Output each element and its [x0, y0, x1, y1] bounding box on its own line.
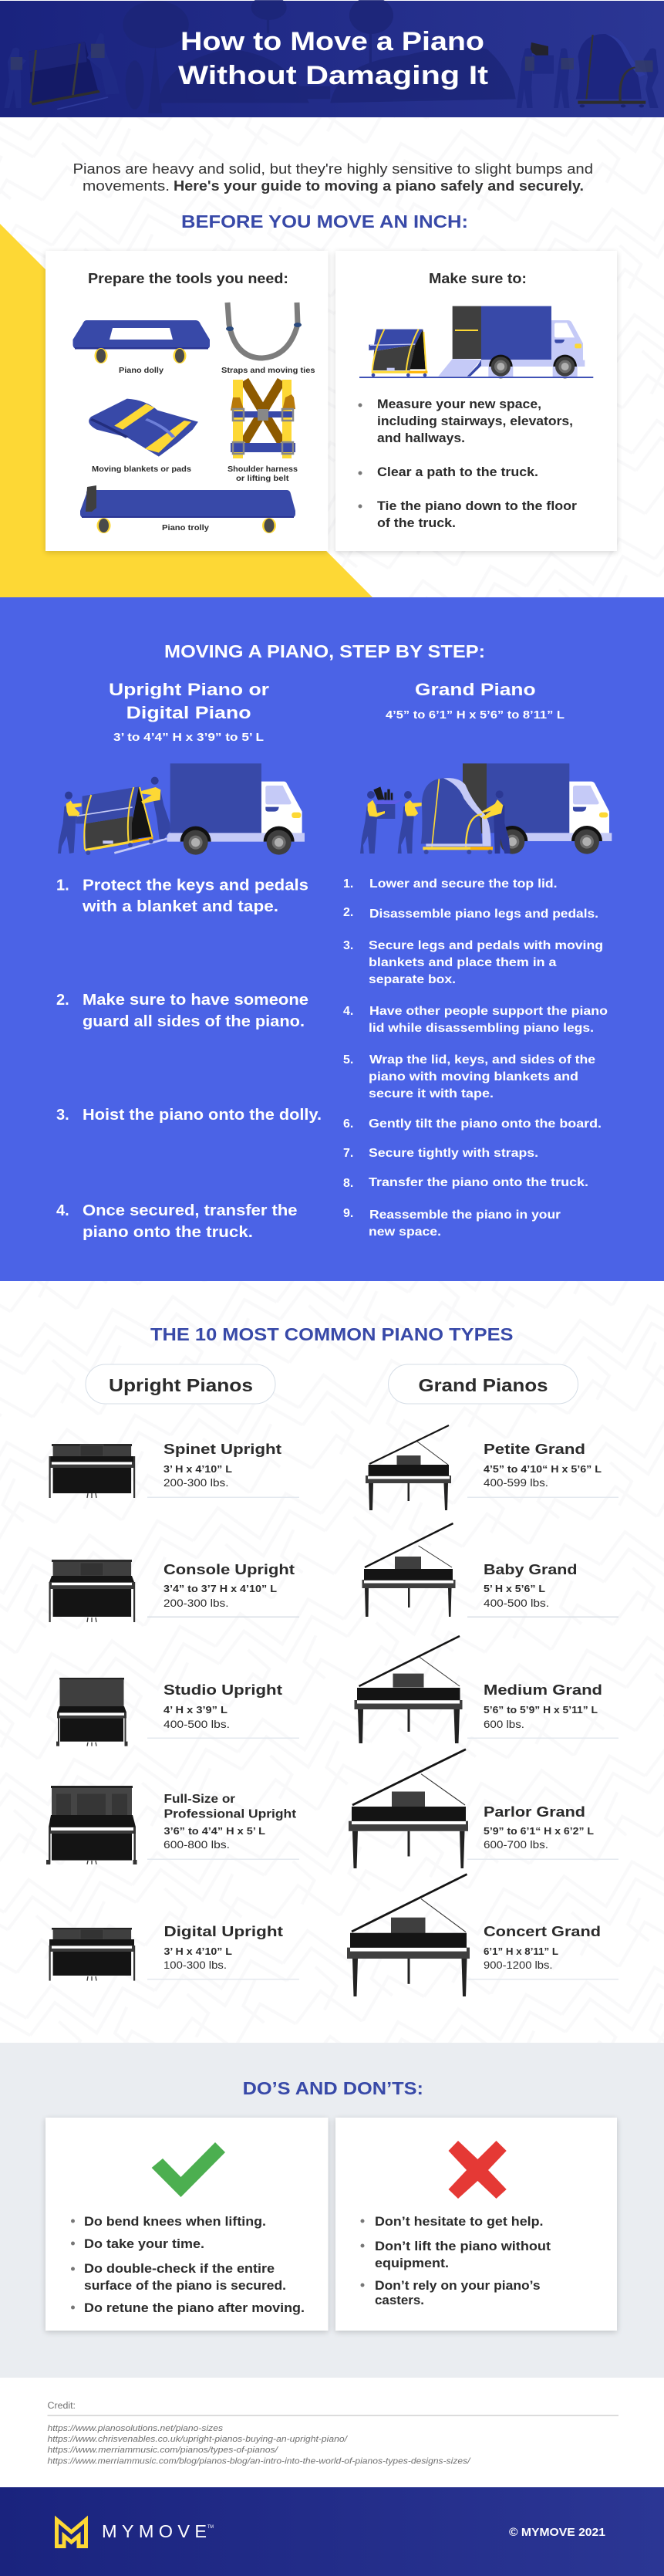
logo wordmark: MYMOVE	[102, 2521, 207, 2541]
grand steps list: Lower and secure the top lid.	[369, 877, 557, 891]
grand steps list: Gently tilt the piano onto the board.	[369, 1117, 602, 1131]
icon: baby grand piano	[362, 1523, 455, 1617]
concert text: 900-1200 lbs.	[484, 1959, 552, 1971]
upright column heading: 3’ to 4’4” H x 3’9” to 5’ L	[113, 731, 264, 744]
upright steps list: Hoist the piano onto the dolly.	[83, 1107, 322, 1124]
grand steps list: separate box.	[369, 973, 456, 986]
icon: shoulder harness	[228, 380, 298, 483]
upright column heading: Upright Piano or	[109, 680, 270, 699]
pill: grand pianos	[389, 1364, 578, 1404]
grand steps list: secure it with tape.	[369, 1087, 494, 1100]
credits: Credit:	[48, 2402, 76, 2411]
heading: piano types: THE 10 MOST COMMON PIANO TYPES	[150, 1324, 514, 1344]
don'ts list: Don’t hesitate to get help.	[375, 2215, 543, 2229]
icon: studio piano	[56, 1678, 128, 1746]
do's list	[71, 2215, 305, 2315]
worker 1	[360, 791, 385, 854]
upright: full-size	[46, 1786, 299, 1864]
checklist: Clear a path to the truck.	[377, 465, 538, 479]
make sure heading: Make sure to:	[429, 270, 527, 286]
digital text	[163, 1923, 283, 1971]
upright column heading	[109, 680, 270, 744]
grand steps list: Reassemble the piano in your	[369, 1209, 561, 1222]
grand steps list: Have other people support the piano	[369, 1005, 608, 1018]
card: do's	[46, 2118, 329, 2332]
icon: green check	[152, 2142, 225, 2197]
header banner	[0, 0, 664, 117]
medium text: Medium Grand	[484, 1682, 602, 1698]
credits: https://www.chrisvenables.co.uk/upright-pianos-buying-an-upright-piano/	[48, 2435, 348, 2444]
pill: upright pianos	[86, 1364, 275, 1404]
icon: piano dolly: Piano dolly	[119, 366, 163, 375]
grand: petite	[366, 1425, 618, 1510]
grand steps list: Secure tightly with straps.	[369, 1147, 538, 1160]
heading: do's and don'ts: DO’S AND DON’TS:	[243, 2078, 423, 2098]
do's list: Do double-check if the entire	[84, 2262, 275, 2276]
grand steps list: Disassemble piano legs and pedals.	[369, 908, 598, 921]
upright steps list: with a blanket and tape.	[82, 898, 278, 915]
yellow background triangle	[0, 224, 372, 597]
intro text	[72, 161, 593, 194]
baby text: 5’ H x 5’6” L	[484, 1583, 545, 1594]
grand: concert	[347, 1875, 618, 1996]
petite text: 400-599 lbs.	[484, 1477, 548, 1489]
upright steps list: guard all sides of the piano.	[83, 1013, 305, 1030]
icon: moving blanket: Moving blankets or pads	[92, 465, 191, 474]
icon: red cross	[449, 2141, 507, 2199]
studio text: 400-500 lbs.	[163, 1719, 230, 1730]
header illustration: movers and grand piano	[517, 34, 659, 108]
digital text: 100-300 lbs.	[163, 1959, 227, 1971]
copyright: © MYMOVE 2021	[509, 2527, 605, 2539]
upright steps list: 3.	[56, 1107, 69, 1124]
upright steps list: Once secured, transfer the	[83, 1202, 298, 1219]
grand: baby	[362, 1523, 618, 1618]
don'ts list: Don’t rely on your piano’s	[375, 2279, 541, 2293]
icon: digital piano	[49, 1928, 135, 1981]
icon: moving blanket	[89, 399, 198, 474]
footer	[0, 2487, 664, 2576]
spinet text: 3’ H x 4’10” L	[163, 1463, 232, 1475]
don'ts list	[361, 2215, 551, 2307]
upright: spinet	[49, 1441, 299, 1498]
parlor text	[484, 1804, 594, 1851]
upright column heading: Digital Piano	[126, 703, 251, 722]
full-size text	[163, 1793, 296, 1851]
grand: medium	[355, 1636, 618, 1743]
credits: https://www.merriammusic.com/pianos/types-of-pianos/	[48, 2446, 278, 2455]
concert text	[484, 1923, 601, 1971]
do's list: Do bend knees when lifting.	[84, 2215, 266, 2229]
parlor text: 5’9” to 6’1“ H x 6’2” L	[484, 1825, 594, 1837]
intro text: movements.	[83, 178, 170, 194]
panel: make sure to	[335, 251, 617, 553]
upright steps list: Protect the keys and pedals	[83, 877, 308, 894]
checklist: of the truck.	[377, 516, 456, 530]
baby text: Baby Grand	[484, 1561, 577, 1577]
grand steps list: 8.	[343, 1177, 353, 1190]
icon: piano dolly	[72, 320, 210, 375]
icon: spinet piano	[49, 1444, 135, 1498]
checklist: and hallways.	[377, 431, 465, 445]
full-size text: 3’6” to 4’4” H x 5’ L	[163, 1825, 265, 1837]
upright: console	[49, 1560, 299, 1622]
grand: parlor	[349, 1749, 618, 1868]
logo mark	[56, 2520, 86, 2548]
console text: 200-300 lbs.	[163, 1597, 228, 1609]
icon: parlor grand piano	[349, 1749, 468, 1868]
spinet text: 200-300 lbs.	[163, 1477, 228, 1489]
intro text: Here's your guide to moving a piano safely and securely.	[174, 178, 584, 194]
upright steps list: 2.	[56, 992, 69, 1009]
grand steps list: 6.	[343, 1117, 353, 1131]
credits: https://www.pianosolutions.net/piano-sizes	[48, 2424, 224, 2433]
full-size text: Full-Size or	[163, 1793, 235, 1806]
studio text: 4’ H x 3’9” L	[163, 1704, 228, 1716]
panel: do's and don'ts	[0, 2043, 664, 2378]
title	[178, 27, 488, 90]
heading: moving a piano: MOVING A PIANO, STEP BY STEP:	[164, 641, 485, 661]
upright: studio	[56, 1678, 299, 1746]
petite text: 4’5” to 4’10“ H x 5’6” L	[484, 1463, 602, 1475]
grand steps list: Secure legs and pedals with moving	[369, 939, 603, 952]
checklist: including stairways, elevators,	[377, 414, 573, 428]
worker left	[58, 792, 82, 854]
title: Without Damaging It	[178, 61, 488, 90]
checklist: Measure your new space,	[377, 397, 541, 411]
console text: Console Upright	[163, 1561, 295, 1577]
icon: full-size piano	[46, 1786, 137, 1864]
grand steps list: 5.	[343, 1053, 353, 1067]
icon: piano trolly: Piano trolly	[162, 523, 209, 532]
medium text	[484, 1682, 602, 1730]
icon: piano trolly	[80, 485, 295, 533]
header illustration: movers and upright piano	[4, 33, 120, 110]
spinet text: Spinet Upright	[163, 1441, 281, 1457]
grand steps list: 2.	[343, 906, 353, 919]
console text	[163, 1561, 295, 1609]
title: How to Move a Piano	[180, 27, 484, 56]
concert text: Concert Grand	[484, 1923, 601, 1939]
checklist	[358, 397, 578, 530]
grand column heading	[386, 680, 565, 722]
pill: grand pianos: Grand Pianos	[418, 1375, 548, 1395]
grand steps list: blankets and place them in a	[369, 956, 557, 969]
icon: straps: Straps and moving ties	[221, 366, 315, 375]
scene: grand piano loaded into truck	[360, 763, 612, 854]
heading: before you move: BEFORE YOU MOVE AN INCH:	[181, 211, 468, 232]
concert text: 6’1” H x 8’11” L	[484, 1946, 558, 1957]
parlor text: Parlor Grand	[484, 1804, 585, 1820]
parlor text: 600-700 lbs.	[484, 1839, 548, 1851]
don'ts list: equipment.	[375, 2257, 449, 2270]
pill: upright pianos: Upright Pianos	[109, 1375, 253, 1395]
grand steps list: 4.	[343, 1005, 353, 1018]
upright steps list: 1.	[56, 877, 69, 894]
card: don'ts	[335, 2118, 617, 2332]
icon: petite grand piano	[366, 1425, 451, 1510]
credits	[48, 2402, 618, 2466]
baby text	[484, 1561, 577, 1609]
header illustration: background trees and house silhouettes	[123, 0, 516, 113]
baby text: 400-500 lbs.	[484, 1597, 549, 1609]
icon: shoulder harness: Shoulder harness	[228, 465, 298, 474]
medium text: 600 lbs.	[484, 1719, 524, 1730]
studio text: Studio Upright	[163, 1682, 282, 1698]
upright: digital	[49, 1923, 299, 1981]
icon: shoulder harness: or lifting belt	[236, 474, 289, 483]
credits: https://www.merriammusic.com/blog/pianos-blog/an-intro-into-the-world-of-pianos-types-designs-sizes/	[48, 2457, 471, 2466]
console text: 3’4” to 3’7 H x 4’10” L	[163, 1583, 277, 1594]
checklist: Tie the piano down to the floor	[377, 499, 578, 513]
medium text: 5’6” to 5’9” H x 5’11” L	[484, 1704, 598, 1716]
upright steps list: piano onto the truck.	[83, 1224, 253, 1241]
box with parts	[373, 786, 403, 819]
grand steps list: 7.	[343, 1147, 353, 1160]
icon: straps	[221, 303, 315, 375]
upright steps list: 4.	[56, 1202, 69, 1219]
panel: step by step	[0, 597, 664, 1281]
intro text: Pianos are heavy and solid, but they're highly sensitive to slight bumps and	[72, 161, 593, 177]
scene: upright piano loaded into truck	[58, 763, 305, 855]
full-size text: Professional Upright	[163, 1807, 296, 1821]
grand steps list: new space.	[369, 1225, 441, 1239]
icon: concert grand piano	[347, 1875, 470, 1996]
grand steps list: 3.	[343, 939, 353, 952]
grand column heading: Grand Piano	[415, 680, 536, 699]
grand steps list: 9.	[343, 1207, 353, 1220]
grand steps list: Wrap the lid, keys, and sides of the	[369, 1053, 595, 1067]
upright steps list: Make sure to have someone	[83, 992, 308, 1009]
icon: medium grand piano	[355, 1636, 463, 1743]
do's list: surface of the piano is secured.	[84, 2279, 286, 2293]
tools heading: Prepare the tools you need:	[88, 270, 288, 286]
grand steps list: Transfer the piano onto the truck.	[369, 1176, 588, 1189]
grand steps list	[343, 877, 608, 1239]
petite text	[484, 1441, 602, 1489]
worker 3	[482, 790, 511, 854]
worker 2	[398, 791, 422, 854]
digital text: 3’ H x 4’10” L	[163, 1946, 232, 1957]
full-size text: 600-800 lbs.	[163, 1839, 230, 1851]
panel: tools	[46, 251, 329, 553]
do's list: Do retune the piano after moving.	[84, 2301, 305, 2315]
grand steps list: 1.	[343, 877, 353, 891]
do's list: Do take your time.	[84, 2237, 204, 2251]
grand steps list: piano with moving blankets and	[369, 1070, 578, 1083]
spinet text	[163, 1441, 281, 1489]
don'ts list: casters.	[375, 2294, 424, 2307]
truck scene with piano on dolly	[359, 306, 593, 378]
logo wordmark: TM	[207, 2525, 214, 2530]
studio text	[163, 1682, 282, 1730]
grand steps list: lid while disassembling piano legs.	[369, 1022, 594, 1035]
digital text: Digital Upright	[163, 1923, 283, 1939]
grand column heading: 4’5” to 6’1” H x 5’6” to 8’11” L	[386, 708, 565, 722]
icon: console piano	[49, 1560, 135, 1622]
don'ts list: Don’t lift the piano without	[375, 2240, 551, 2253]
petite text: Petite Grand	[484, 1441, 585, 1457]
upright steps list	[56, 877, 322, 1241]
worker right	[141, 777, 160, 804]
